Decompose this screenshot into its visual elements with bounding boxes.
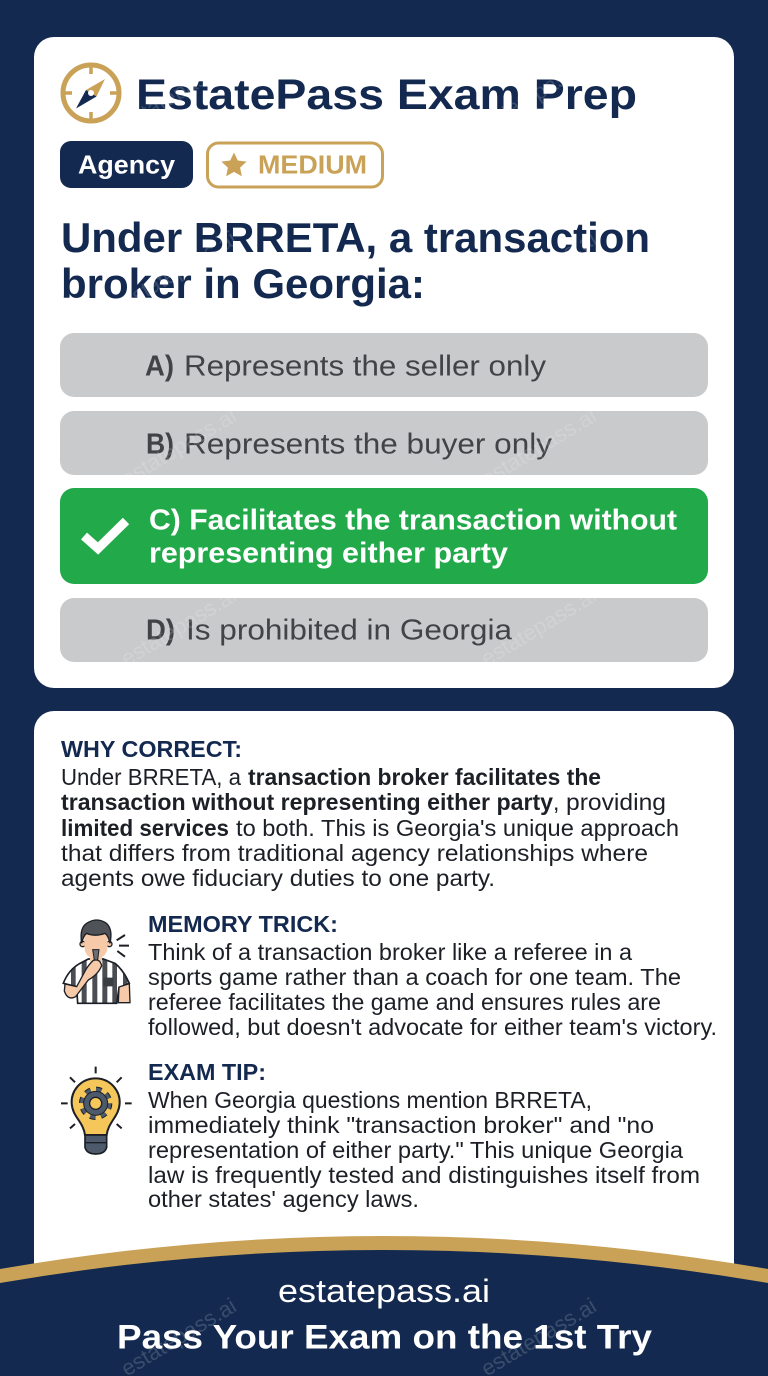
exam tip section: other states' agency laws.	[148, 1186, 419, 1212]
icon: light bulb with gear	[61, 1067, 132, 1154]
memory trick section: referee facilitates the game and ensures rules are	[148, 989, 661, 1015]
question heading	[61, 214, 650, 307]
exam tip section: When Georgia questions mention BRRETA,	[148, 1087, 592, 1113]
option C: correct answer: C) Facilitates the transaction without	[149, 504, 677, 536]
why correct section: transaction without representing either party	[61, 789, 553, 815]
why correct section	[61, 736, 679, 891]
option B	[60, 411, 708, 475]
memory trick section: MEMORY TRICK:	[148, 911, 338, 937]
text: estatepass.ai	[477, 403, 601, 491]
why correct section: agents owe fiduciary duties to one party.	[61, 865, 495, 891]
option B: B)	[146, 428, 174, 460]
footer tagline: Pass Your Exam on the 1st Try	[117, 1318, 652, 1356]
badge: Agency: Agency	[78, 150, 176, 180]
icon: referee	[63, 920, 130, 1005]
exam tip section: law is frequently tested and distinguishes itself from	[148, 1162, 700, 1188]
why correct section: that differs from traditional agency relationships where	[61, 840, 648, 866]
footer	[0, 1236, 768, 1376]
panel: question card	[34, 37, 734, 688]
option D	[60, 598, 708, 662]
why correct section: ,	[553, 789, 559, 815]
text: estatepass.ai	[117, 403, 241, 491]
memory trick section: Think of a transaction broker like a referee in a	[148, 939, 632, 965]
option C: correct answer	[60, 488, 708, 584]
badge: Medium	[208, 143, 382, 187]
badge: Medium: MEDIUM	[258, 150, 367, 180]
why correct section: transaction broker facilitates the	[248, 764, 601, 790]
exam tip section: representation of either party." This unique Georgia	[148, 1137, 683, 1163]
why correct section: Under BRRETA, a	[61, 764, 241, 790]
question heading: broker in Georgia:	[61, 260, 425, 307]
option A: A)	[145, 350, 174, 382]
text: estatepass.ai	[117, 583, 241, 671]
gold arc	[0, 1236, 768, 1376]
option B: Represents the buyer only	[184, 428, 553, 460]
text: estatepass.ai	[477, 48, 601, 136]
option D: D)	[146, 614, 175, 646]
question heading: Under BRRETA, a transaction	[61, 214, 650, 261]
memory trick section: followed, but doesn't advocate for either team's victory.	[148, 1014, 717, 1040]
text: estatepass.ai	[117, 48, 241, 136]
exam tip section: EXAM TIP:	[148, 1059, 266, 1085]
option D: Is prohibited in Georgia	[186, 614, 513, 646]
footer url: estatepass.ai	[278, 1273, 490, 1309]
text: estatepass.ai	[477, 226, 601, 314]
why correct section: to both. This is Georgia's unique approach	[236, 815, 679, 841]
text: estatepass.ai	[117, 226, 241, 314]
text: estatepass.ai	[477, 583, 601, 671]
why correct section: WHY CORRECT:	[61, 736, 242, 762]
badge: Agency	[60, 141, 193, 188]
panel: explanation card	[34, 711, 734, 1264]
option C: correct answer: representing either party	[149, 538, 508, 570]
exam tip section	[148, 1059, 700, 1212]
why correct section: providing	[566, 789, 666, 815]
icon: check mark	[84, 521, 126, 548]
memory trick section	[148, 911, 717, 1040]
title: EstatePass Exam Prep	[136, 71, 637, 119]
memory trick section: sports game rather than a coach for one team. The	[148, 964, 681, 990]
icon: compass logo	[63, 65, 119, 121]
option A	[60, 333, 708, 397]
option A: Represents the seller only	[184, 350, 547, 382]
exam tip section: immediately think "transaction broker" and "no	[148, 1112, 654, 1138]
why correct section: limited services	[61, 815, 229, 841]
